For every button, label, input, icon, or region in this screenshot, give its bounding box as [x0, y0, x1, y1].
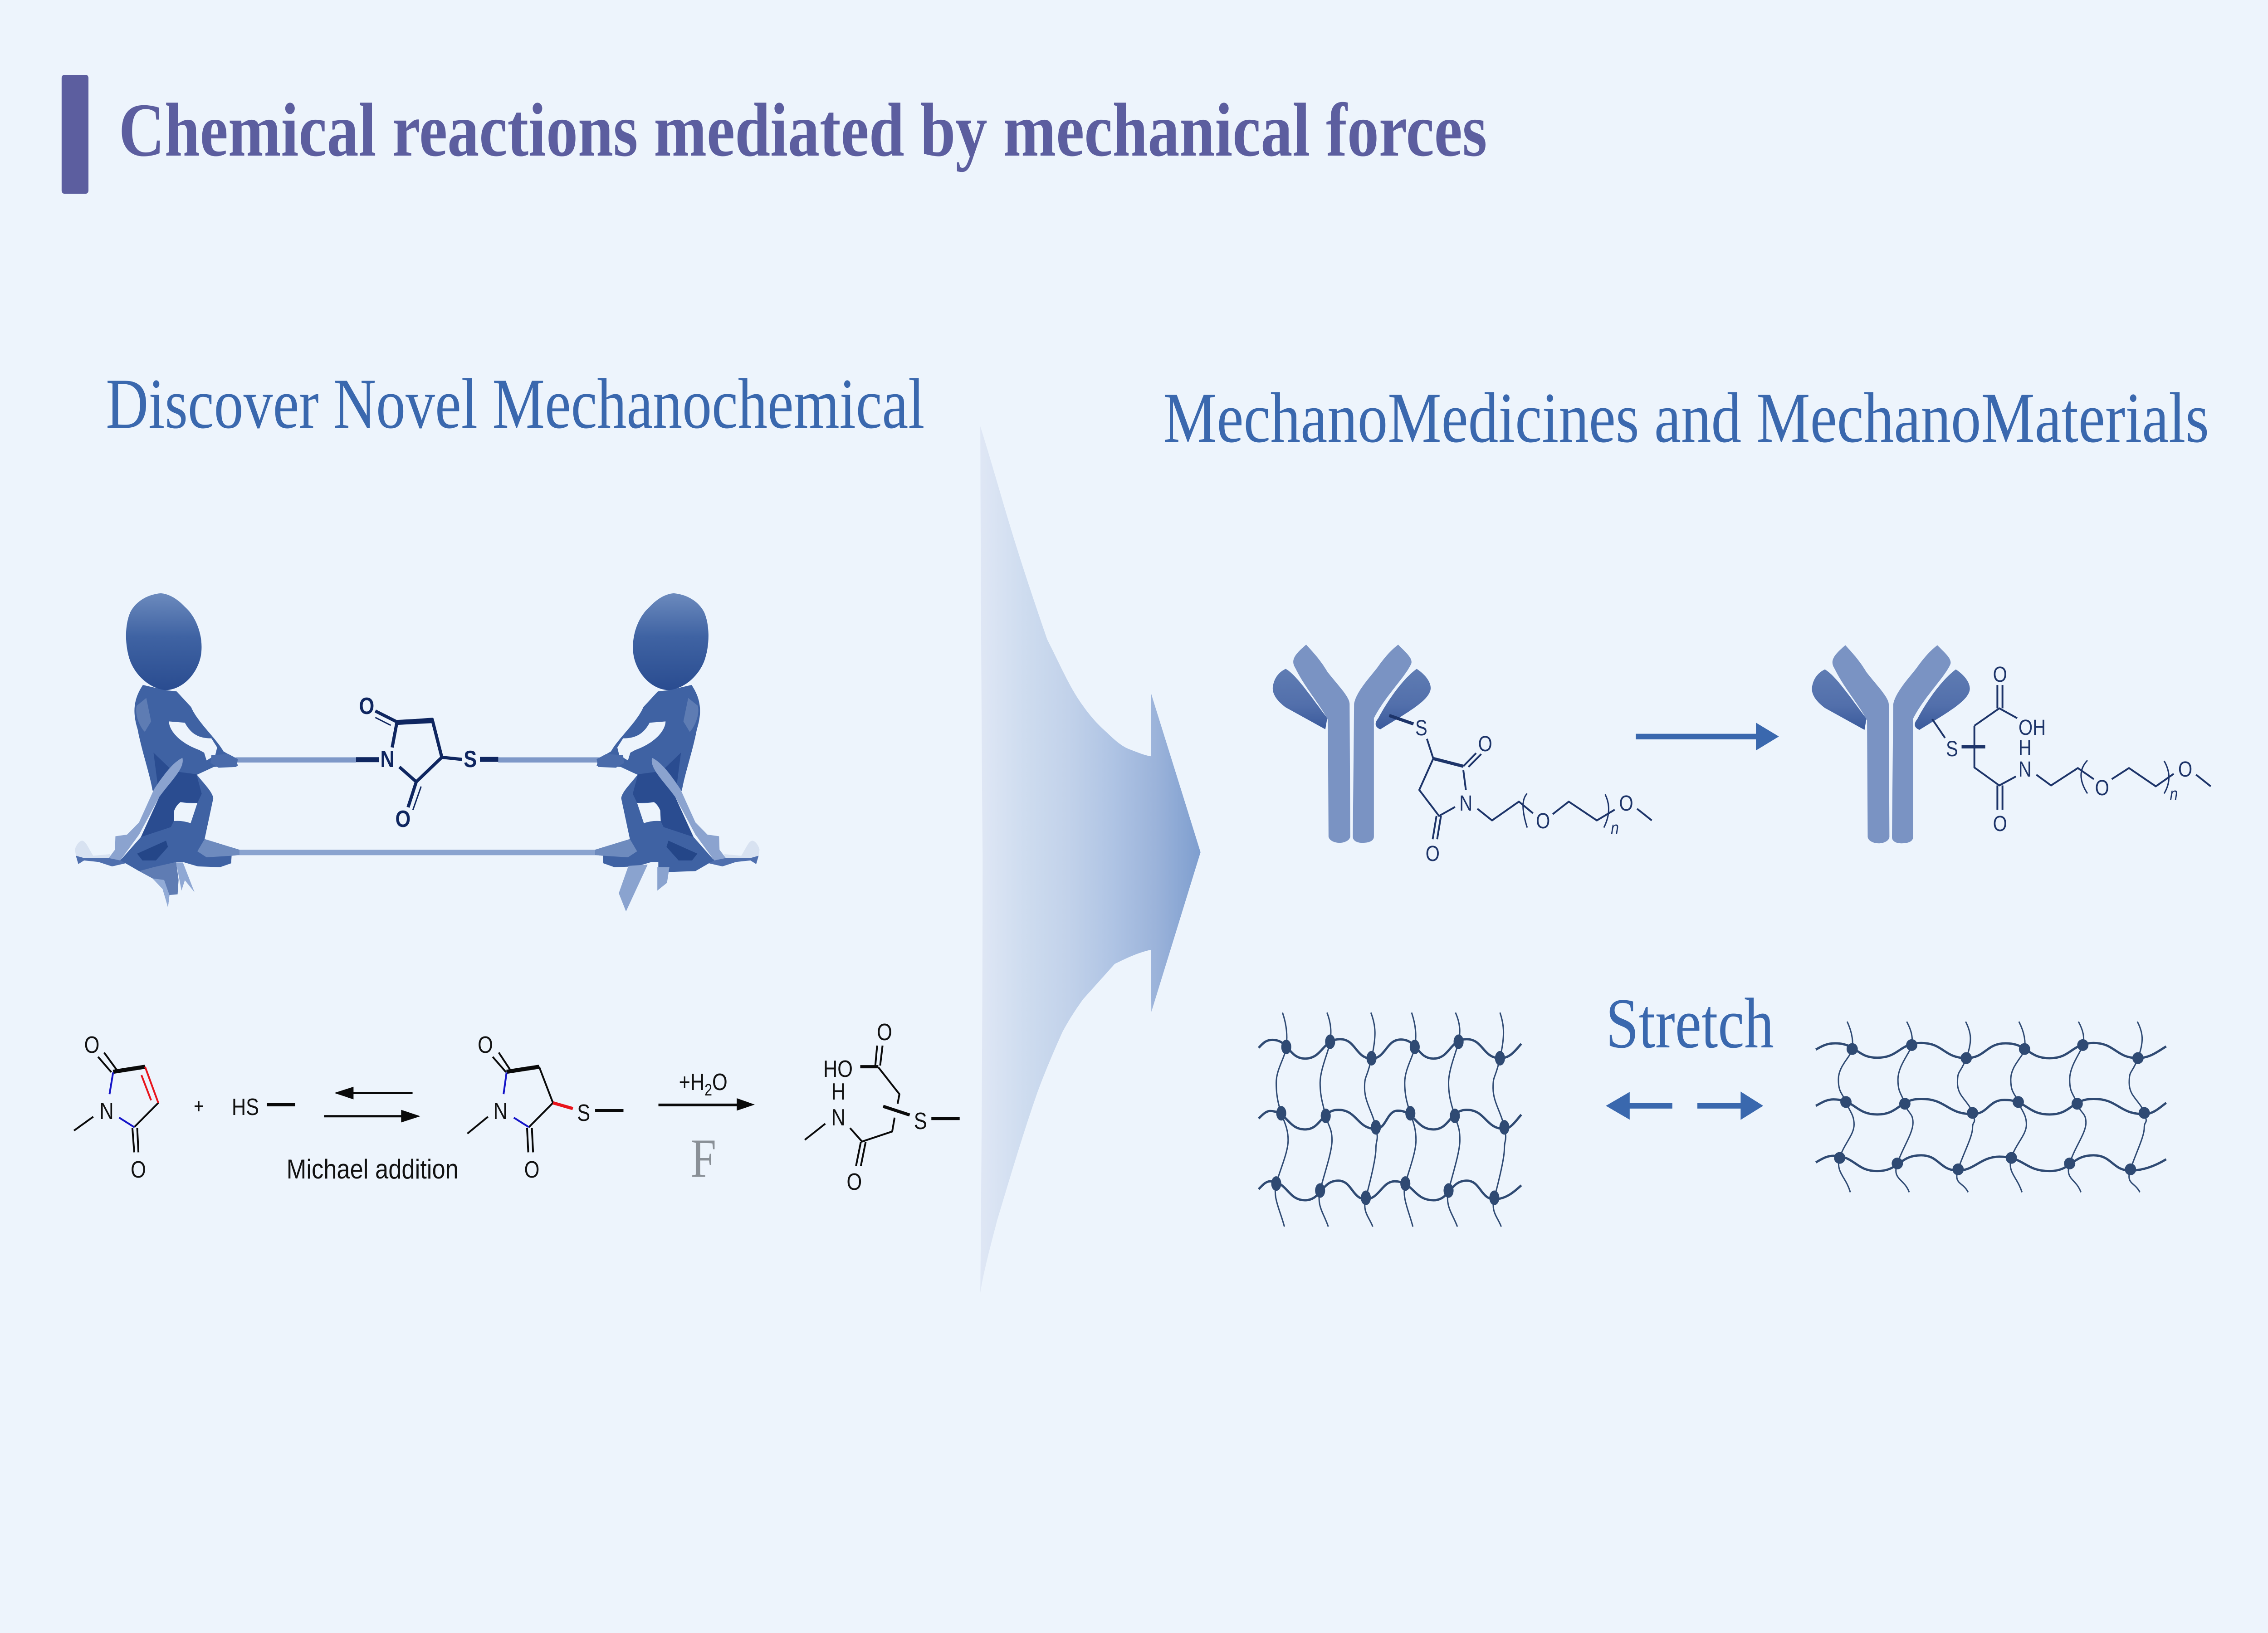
big gradient arrow: [980, 426, 1201, 1293]
conjugate atom labels: S: [1415, 716, 1427, 740]
conjugate atom labels: O: [1536, 809, 1550, 833]
thiol label: HS: [232, 1094, 259, 1120]
scheme atom labels: O: [846, 1169, 862, 1195]
molecule atom labels: S: [464, 746, 477, 772]
molecule atom labels: O: [395, 806, 411, 832]
rope: top left: [235, 758, 356, 763]
conjugate atom labels: O: [1619, 792, 1633, 816]
conjugate atom labels: n: [1611, 818, 1619, 838]
conjugate atom labels: N: [2019, 758, 2032, 782]
scheme atom labels: N: [99, 1098, 114, 1125]
conjugate atom labels: [1415, 663, 2192, 866]
rope: top right: [498, 758, 600, 763]
heading: mechanomedicines and mechanomaterials: MechanoMedicines and MechanoMaterials: [1163, 378, 2209, 458]
stretch arrow: right: [1697, 1091, 1763, 1120]
conjugate bonds: left: [1389, 715, 1652, 839]
scheme atom labels: H: [831, 1079, 846, 1105]
antibody: right: [1812, 645, 1970, 843]
reaction scheme: maleimide-thiol addition and hydrolysis: [74, 1019, 960, 1195]
conjugate atom labels: O: [1426, 842, 1440, 866]
scheme atom labels: O: [524, 1157, 539, 1183]
figure: right puller: [595, 593, 760, 872]
conjugate atom labels: S: [1946, 737, 1958, 761]
scheme atom labels: O: [131, 1157, 146, 1183]
ring-opened product bonds: [805, 1046, 960, 1166]
scheme atom labels: [84, 1019, 927, 1195]
conjugate atom labels: N: [1459, 792, 1472, 816]
panel: antibody conjugate transformation: [1273, 645, 2211, 866]
scheme atom labels: O: [478, 1032, 493, 1058]
conjugate bonds: right: [1932, 685, 2211, 810]
scheme atom labels: +: [194, 1095, 204, 1118]
drips under left figure: [139, 862, 195, 907]
title accent bar: [62, 75, 88, 194]
water label: O: [712, 1069, 728, 1095]
water label: +H: [679, 1069, 704, 1095]
antibody: left: [1273, 645, 1431, 843]
molecule atom labels: [359, 693, 477, 832]
thiol bond: [267, 1103, 295, 1106]
conjugate atom labels: O: [1993, 663, 2007, 687]
conjugate atom labels: OH: [2019, 716, 2046, 740]
scheme atom labels: S: [914, 1108, 927, 1134]
scheme atom labels: N: [494, 1098, 508, 1125]
scheme atom labels: O: [84, 1032, 99, 1058]
conjugate atom labels: O: [2095, 776, 2109, 800]
michael addition label: Michael addition: [287, 1154, 459, 1184]
figure: left puller: [75, 593, 240, 872]
conjugate atom labels: O: [1993, 812, 2007, 836]
molecule bonds: [356, 711, 498, 810]
network: stretched: [1816, 1022, 2166, 1192]
reaction arrow: [1636, 723, 1779, 750]
stretch arrow: left: [1606, 1092, 1672, 1120]
heading: discover novel mechanochemical: Discover Novel Mechanochemical: [106, 364, 924, 444]
scheme atom labels: O: [877, 1019, 892, 1046]
drips under right figure: [619, 865, 670, 911]
force label: F: [691, 1128, 716, 1189]
acid label: HO: [823, 1056, 853, 1082]
maleimide bonds: [74, 1052, 158, 1152]
conjugate atom labels: O: [1478, 732, 1492, 756]
network: unstretched: [1259, 1012, 1521, 1227]
title: Chemical reactions mediated by mechanical forces: [119, 88, 1487, 172]
illustration: tug of war on a thiosuccinimide bond: [75, 593, 760, 911]
stretch label: Stretch: [1606, 984, 1774, 1063]
scheme atom labels: N: [831, 1105, 846, 1131]
molecule atom labels: O: [359, 693, 374, 719]
reversible arrows: [324, 1087, 420, 1123]
conjugate atom labels: H: [2019, 736, 2032, 760]
succinimide thioether bonds: [467, 1052, 623, 1152]
rope: bottom: [238, 850, 597, 855]
panel: polymer network stretching: [1259, 984, 2166, 1227]
conjugate atom labels: n: [2170, 784, 2178, 804]
water label: 2: [704, 1081, 712, 1100]
molecule atom labels: N: [381, 746, 395, 772]
force arrow: [659, 1098, 755, 1111]
scheme atom labels: S: [577, 1100, 590, 1126]
conjugate atom labels: O: [2178, 758, 2192, 782]
